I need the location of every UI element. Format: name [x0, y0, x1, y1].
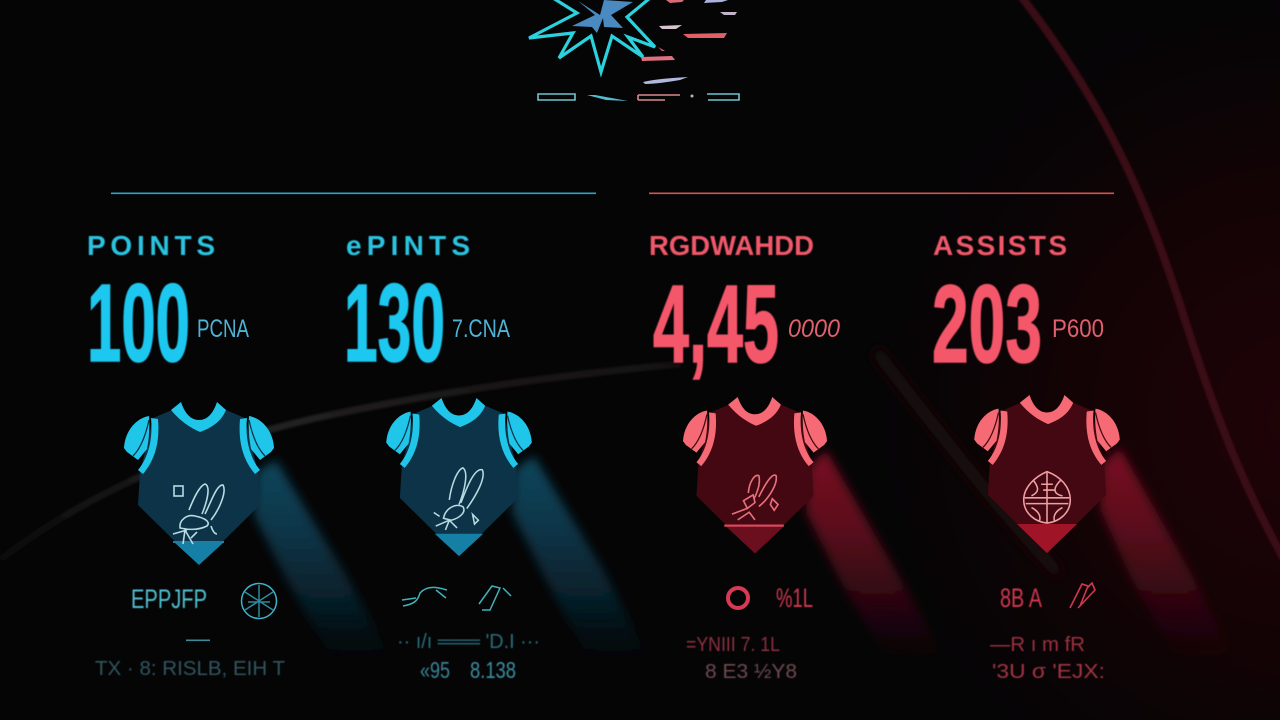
beam	[1100, 448, 1238, 665]
panel: stat 4 assists	[932, 230, 1238, 665]
jersey	[974, 395, 1120, 553]
detail: —R ı m fR	[990, 634, 1085, 656]
footer text: stat 1	[95, 584, 285, 680]
number: 100	[87, 262, 190, 385]
caption: 8B A	[1000, 583, 1042, 613]
detail: =YNIII 7. 1L	[686, 634, 780, 656]
logo on jersey	[434, 468, 483, 530]
beam	[806, 450, 948, 665]
dash	[186, 640, 210, 641]
unit: 7.CNA	[452, 315, 510, 343]
icon: ring	[728, 588, 748, 608]
number: 130	[344, 262, 445, 385]
logo: globe on jersey	[1024, 472, 1070, 523]
caption: %1L	[776, 583, 813, 613]
heading: ASSISTS	[933, 230, 1067, 261]
beam	[512, 456, 652, 665]
icon: marks	[402, 586, 511, 610]
icon: wheel	[242, 584, 276, 618]
panel: stat 2 points	[344, 230, 652, 665]
panel: stat 3 rebounds	[649, 230, 948, 665]
figures: «95	[420, 657, 450, 683]
jersey	[386, 398, 532, 556]
title marks	[538, 0, 739, 101]
icon: star	[529, 0, 655, 72]
divider: cyan team	[111, 192, 596, 194]
footer text: stat 4	[990, 583, 1105, 683]
figures: '3U σ 'EJX:	[992, 661, 1105, 683]
footer text: stat 2	[397, 586, 540, 683]
detail: ·· ı/ı ═══ 'D.I ···	[397, 631, 540, 653]
unit: P600	[1052, 315, 1104, 343]
beam	[254, 460, 395, 665]
heading: POINTS	[87, 230, 215, 261]
unit: 0000	[788, 315, 840, 343]
number: 4,45	[653, 263, 779, 386]
icon: mark	[1070, 583, 1095, 608]
divider: red team	[649, 192, 1114, 194]
jersey	[124, 402, 274, 565]
detail: TX · 8: RISLB, EIH T	[95, 658, 285, 680]
footer text: stat 3	[686, 583, 813, 683]
panel: stat 1 points	[87, 230, 395, 665]
figures: 8 E3 ½Y8	[705, 661, 797, 683]
icon: star centre leaves	[572, 0, 633, 33]
heading: ePINTS	[346, 230, 470, 261]
logo on jersey	[732, 475, 778, 520]
figures: 8.138	[470, 657, 516, 683]
number: 203	[932, 263, 1042, 386]
jersey	[683, 397, 827, 553]
caption: EPPJFP	[131, 584, 207, 614]
logo on jersey	[173, 484, 224, 544]
logo: star emblem with title marks	[529, 0, 739, 101]
heading: RGDWAHDD	[649, 230, 814, 261]
unit: PCNA	[197, 315, 249, 343]
